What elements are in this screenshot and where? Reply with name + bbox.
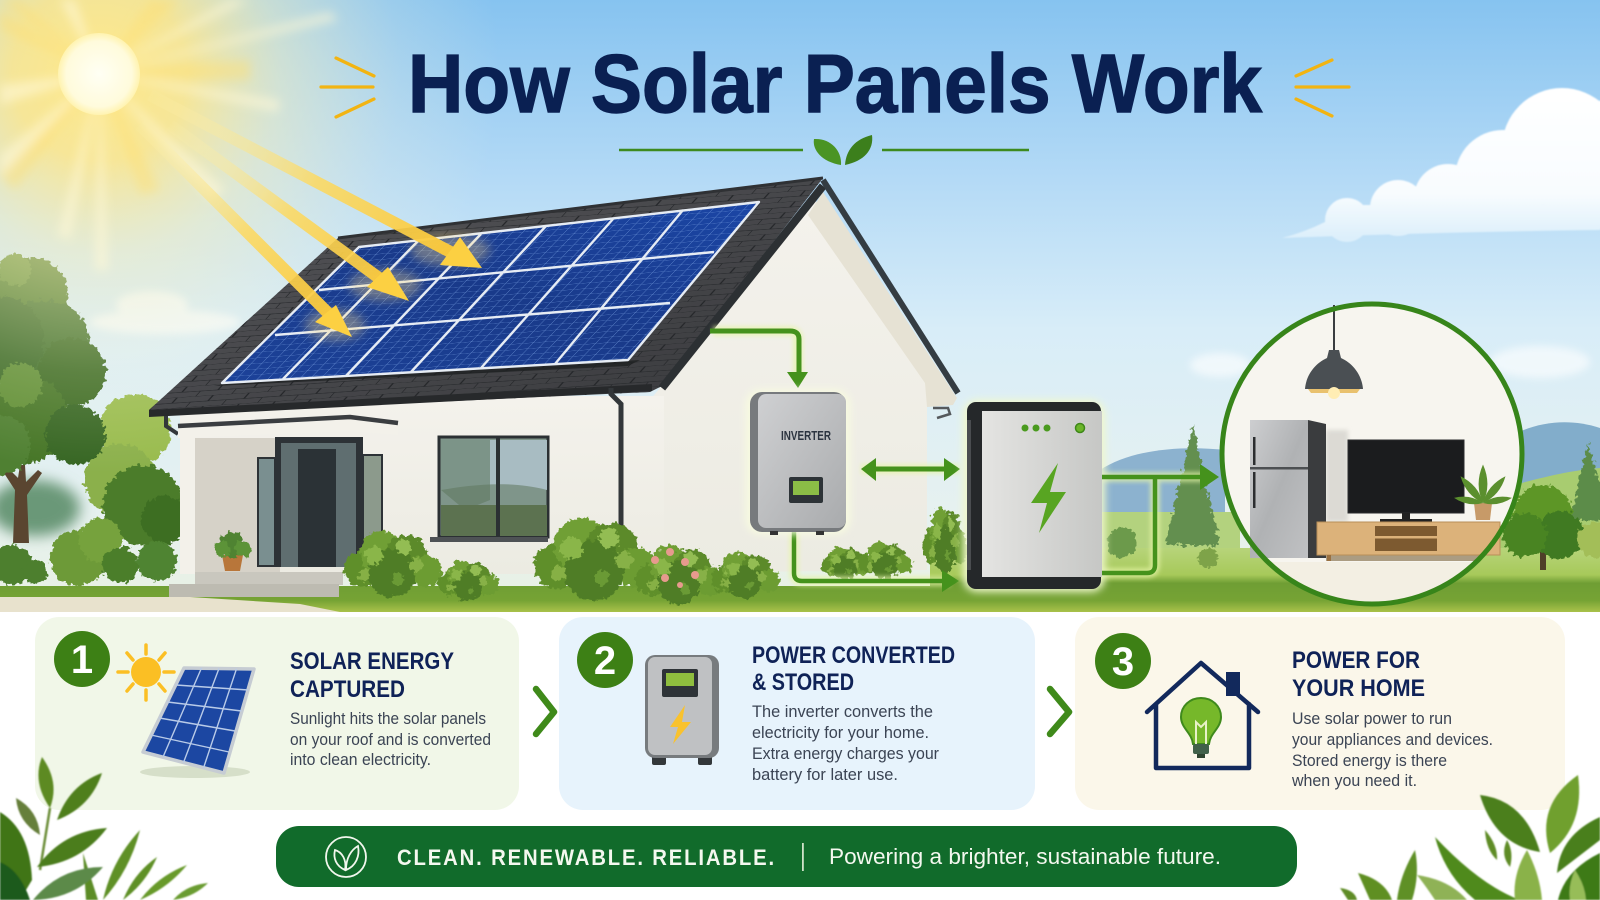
downpipes — [611, 388, 621, 527]
step 3 heading: POWER FOR — [1292, 647, 1420, 674]
banner slogan: CLEAN. RENEWABLE. RELIABLE. — [397, 845, 776, 870]
step 3 text: Use solar power to run — [1292, 710, 1452, 728]
step 2 badge — [577, 632, 633, 688]
media cabinet — [1317, 522, 1500, 561]
step 1 text: on your roof and is converted — [290, 731, 491, 749]
cabinet shadow — [1326, 556, 1479, 561]
sun rays — [0, 0, 338, 270]
step 1 badge — [54, 631, 110, 687]
steps — [195, 572, 343, 585]
clouds — [90, 88, 1600, 378]
battery bolt — [1031, 463, 1066, 533]
white lower panel — [0, 612, 1600, 900]
distant hills and fields — [1100, 422, 1600, 560]
step 3 text — [1291, 710, 1493, 790]
porch pillar and opening — [180, 432, 280, 574]
porch roof — [178, 415, 398, 438]
step 1 text — [290, 710, 491, 769]
arrow: step 2 to 3 — [1050, 689, 1069, 734]
inverter — [750, 392, 846, 535]
wall shadow — [1326, 430, 1348, 522]
house — [149, 178, 958, 597]
battery — [967, 402, 1102, 589]
step 3 heading — [1292, 647, 1425, 702]
step 2 heading: POWER CONVERTED — [752, 642, 955, 669]
arrow: step 1 to 2 — [536, 689, 554, 734]
step 2 heading — [752, 642, 955, 696]
icon: house with bulb — [1147, 663, 1258, 768]
television — [1348, 440, 1464, 522]
gable edge — [823, 180, 958, 393]
arrow: panels to inverter — [710, 331, 808, 388]
right foliage — [1340, 775, 1600, 900]
gable wall — [650, 200, 948, 573]
step 2 text: battery for later use. — [752, 766, 898, 784]
step 2 badge: 2 — [594, 639, 616, 683]
title: How Solar Panels Work — [408, 37, 1263, 130]
step 1 card — [35, 617, 519, 810]
title divider with leaf — [619, 135, 1029, 165]
step 1 text: Sunlight hits the solar panels — [290, 710, 486, 728]
front wall — [180, 396, 664, 574]
footer banner — [276, 826, 1297, 887]
icon: solar panel — [140, 668, 254, 778]
roof — [149, 178, 823, 415]
inverter glow — [746, 390, 850, 534]
panel sun glare — [305, 234, 490, 341]
icon: sun — [118, 645, 174, 700]
sky background — [0, 0, 1600, 612]
garden bushes — [344, 508, 968, 605]
battery glow — [963, 400, 1105, 592]
arrow: inverter battery two-way — [861, 458, 960, 481]
gable fascia — [662, 186, 823, 388]
arrow: inverter to battery — [794, 532, 959, 592]
refrigerator — [1250, 420, 1326, 558]
window — [430, 437, 548, 542]
step 1 heading — [290, 648, 454, 703]
ground grass — [0, 548, 1600, 612]
potted plant — [214, 532, 251, 571]
home appliances circle — [1222, 304, 1522, 604]
step 3 card — [1075, 617, 1565, 810]
step 3 text: Stored energy is there — [1292, 752, 1447, 770]
door — [258, 437, 382, 567]
step 2 text: Extra energy charges your — [752, 745, 939, 763]
step 3 text: your appliances and devices. — [1292, 731, 1493, 749]
eave — [149, 384, 652, 417]
step 1 heading: SOLAR ENERGY — [290, 648, 454, 675]
title accent right — [1296, 60, 1349, 116]
step 3 badge — [1095, 633, 1151, 689]
title accent left — [321, 58, 374, 117]
floor — [1272, 562, 1472, 602]
arrow: battery to home — [1102, 464, 1219, 573]
energy flow glow — [713, 331, 1210, 581]
step 3 badge: 3 — [1112, 640, 1134, 684]
right trees — [1107, 425, 1600, 570]
banner tagline: Powering a brighter, sustainable future. — [829, 844, 1221, 869]
step 3 heading: YOUR HOME — [1292, 675, 1425, 702]
sunlight arrows — [140, 95, 482, 337]
potted plant — [1453, 464, 1513, 520]
step 1 heading: CAPTURED — [290, 676, 405, 703]
gable soffit — [808, 192, 957, 407]
gable gutter — [933, 408, 950, 418]
icon: inverter battery — [645, 655, 719, 765]
step 2 text: electricity for your home. — [752, 724, 929, 742]
step 1 text: into clean electricity. — [290, 751, 431, 769]
inverter label: INVERTER — [781, 429, 831, 443]
step 2 heading: & STORED — [752, 669, 854, 696]
left trees — [0, 254, 189, 586]
solar array — [214, 202, 759, 386]
lamp — [1305, 305, 1363, 399]
sun — [58, 33, 140, 115]
step 3 text: when you need it. — [1291, 772, 1417, 790]
garden path — [0, 597, 340, 612]
left foliage — [0, 757, 208, 900]
step 2 text: The inverter converts the — [752, 703, 933, 721]
sun glow — [0, 0, 520, 480]
step 2 card — [559, 617, 1035, 810]
step 2 text — [752, 703, 939, 784]
inverter screen — [789, 477, 823, 503]
banner leaf icon — [326, 837, 366, 877]
step 1 badge: 1 — [71, 638, 93, 682]
